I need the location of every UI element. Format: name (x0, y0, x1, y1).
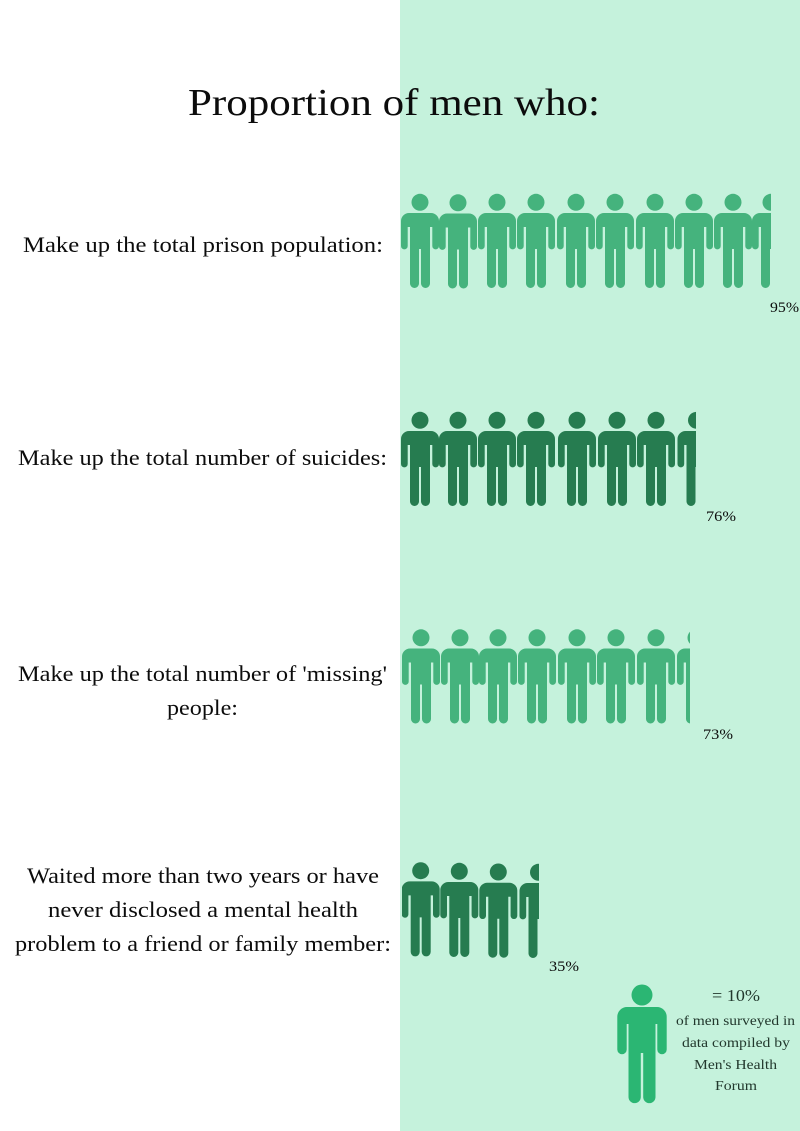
row 2 label: suicides: Make up the total number of suicides: (18, 445, 387, 470)
legend icon: person equals 10% (617, 984, 667, 1103)
row 3 value: 73% (703, 727, 733, 743)
legend text: Men's Health (694, 1058, 777, 1073)
row 1 pictogram: 95% (401, 194, 790, 288)
row 3 pictogram: 73% (402, 629, 715, 724)
legend text (676, 986, 795, 1094)
row 3 label: missing people (18, 661, 387, 720)
row 2 value: 76% (706, 509, 736, 525)
legend text: data compiled by (682, 1036, 790, 1051)
legend text: Forum (715, 1079, 757, 1094)
row 3 label: missing people: people: (167, 695, 238, 720)
legend text: of men surveyed in (676, 1014, 795, 1029)
row 4 label: disclosure (15, 863, 391, 956)
row 4 value: 35% (549, 959, 579, 975)
row 1 label: prison population: Make up the total prison population: (23, 232, 383, 257)
title: Proportion of men who: (188, 82, 600, 124)
legend text: = 10% (712, 986, 760, 1005)
row 1 value: 95% (770, 300, 799, 316)
row 4 label: disclosure: never disclosed a mental health (48, 897, 358, 922)
row 4 pictogram: 35% (402, 862, 539, 958)
row 3 label: missing people: Make up the total number of 'missing' (18, 661, 387, 686)
background panel: mint right half (400, 0, 800, 1131)
row 4 label: disclosure: problem to a friend or family member: (15, 931, 391, 956)
row 2 pictogram: 76% (401, 412, 716, 506)
row 4 label: disclosure: Waited more than two years or have (27, 863, 379, 888)
